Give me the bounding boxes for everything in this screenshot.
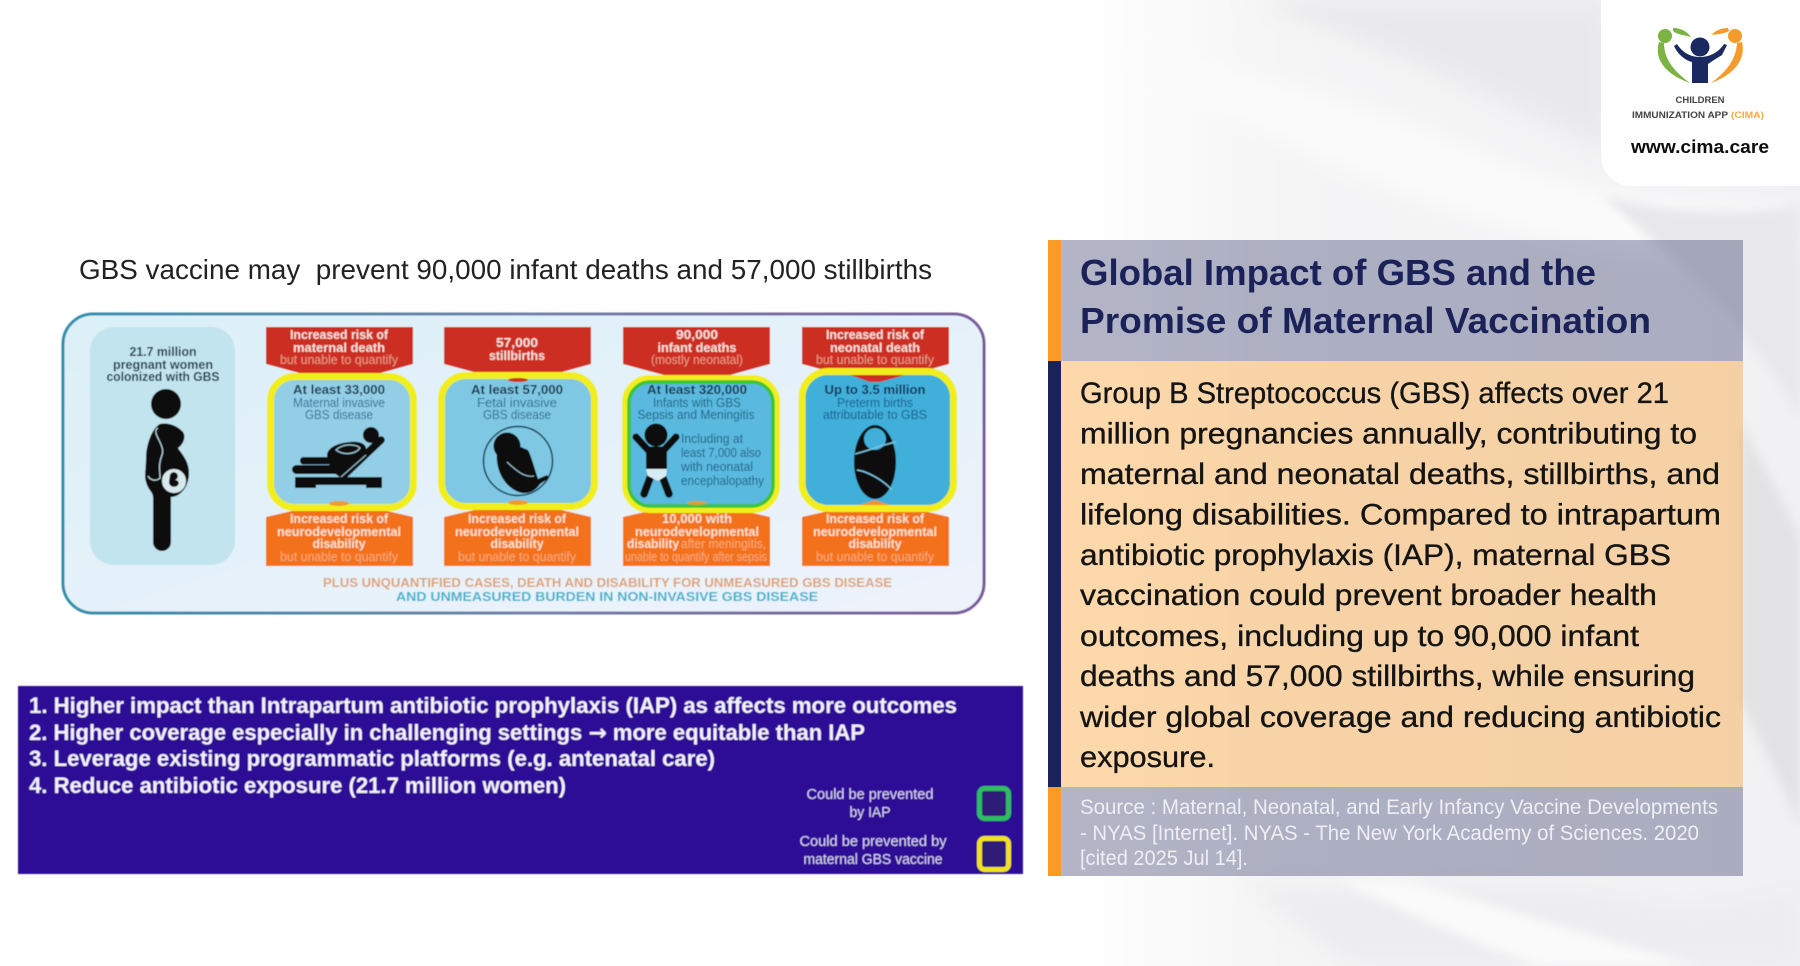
- panel: source: [1048, 787, 1743, 876]
- banner: neurodevelopmental disability: but unable to quantify: [280, 550, 399, 564]
- note: unquantified burden: [323, 575, 892, 604]
- text: app name: [1632, 95, 1764, 121]
- box: preterm births: attributable to GBS: [823, 407, 927, 422]
- box: infants with sepsis and meningitis: with neonatal: [680, 460, 753, 474]
- banner: maternal death: but unable to quantify: [280, 353, 399, 367]
- panel: title block: [1048, 240, 1743, 361]
- banner: infant deaths: infant deaths: [658, 341, 737, 355]
- box: infants with sepsis and meningitis: least 7,000 also: [681, 446, 761, 460]
- note: unquantified burden: AND UNMEASURED BURDEN IN NON-INVASIVE GBS DISEASE: [396, 589, 818, 604]
- box: infants with sepsis and meningitis: Sepsis and Meningitis: [638, 407, 755, 422]
- banner: neurodevelopmental disability: [802, 508, 949, 566]
- legend: prevented by vaccine: Could be prevented by: [800, 833, 947, 850]
- box: preterm births: Preterm births: [837, 395, 913, 410]
- card: pregnant women colonized: [90, 327, 235, 565]
- text: description: lifelong disabilities. Compared to intrapartum: [1080, 498, 1721, 532]
- banner: 10,000 with disability: unable to quantify after sepsis: [625, 550, 767, 564]
- legend: prevented by vaccine: maternal GBS vaccine: [804, 851, 942, 868]
- list: four benefits: 1. Higher impact than Intrapartum antibiotic prophylaxis (IAP) as affects more outcomes: [29, 693, 957, 718]
- text: source citation: [1080, 796, 1718, 870]
- box: infants with sepsis and meningitis: At least 320,000: [647, 382, 747, 397]
- list: four benefits: 2. Higher coverage especially in challenging settings → more equitable than IAP: [29, 720, 865, 746]
- banner: neurodevelopmental disability: disability: [490, 537, 544, 551]
- box: infants with sepsis and meningitis: encephalopathy: [681, 474, 765, 488]
- box: preterm births: [802, 372, 954, 508]
- icon: fetus in circle: [484, 426, 552, 496]
- text: description: million pregnancies annually, contributing to: [1080, 418, 1697, 450]
- card: pregnant women colonized: pregnant women: [113, 357, 213, 372]
- banner: neonatal death: neonatal death: [830, 341, 920, 355]
- box: maternal invasive disease: At least 33,000: [293, 382, 385, 397]
- banner: infant deaths: (mostly neonatal): [651, 353, 743, 367]
- heading: global impact: [1080, 252, 1651, 341]
- box: fetal invasive disease: GBS disease: [483, 407, 551, 422]
- banner: neurodevelopmental disability: Increased risk of: [826, 512, 925, 526]
- banner: maternal death: [266, 327, 413, 375]
- column: fetal: [442, 327, 594, 566]
- banner: 10,000 with disability: [623, 508, 770, 566]
- box: maternal invasive disease: [270, 376, 414, 508]
- box: infants with sepsis and meningitis: Including at: [681, 432, 744, 446]
- panel: body text: [1048, 361, 1743, 787]
- text: app name: IMMUNIZATION APP: [1632, 110, 1729, 121]
- list: four benefits: 3. Leverage existing programmatic platforms (e.g. antenatal care): [29, 746, 715, 771]
- text: website: www.cima.care: [1630, 137, 1769, 157]
- legend: prevented by vaccine: [800, 833, 1008, 870]
- heading: global impact: Global Impact of GBS and the: [1080, 252, 1596, 293]
- panel: burden infographic: [63, 314, 984, 613]
- text: source citation: - NYAS [Internet]. NYAS - The New York Academy of Sciences. 2020: [1080, 822, 1699, 845]
- list: four benefits: [29, 693, 957, 798]
- text: description: antibiotic prophylaxis (IAP), maternal GBS: [1080, 539, 1671, 572]
- banner: neurodevelopmental disability: disability: [848, 537, 902, 551]
- banner: 10,000 with disability: disability: [627, 537, 679, 551]
- text: source citation: [cited 2025 Jul 14].: [1080, 847, 1248, 870]
- icon: woman on bed: [292, 427, 382, 488]
- text: source citation: Source : Maternal, Neonatal, and Early Infancy Vaccine Developments: [1080, 796, 1718, 819]
- panel: benefits of maternal vaccine: [18, 686, 1023, 874]
- icon: swaddled baby: [854, 425, 896, 499]
- banner: 10,000 with disability: 10,000 with: [662, 512, 732, 526]
- legend: prevented by IAP: Could be prevented: [806, 786, 934, 803]
- banner: neonatal death: but unable to quantify: [816, 353, 935, 367]
- box: fetal invasive disease: At least 57,000: [471, 382, 563, 397]
- banner: neurodevelopmental disability: Increased risk of: [468, 512, 567, 526]
- banner: infant deaths: 90,000: [676, 328, 718, 342]
- box: fetal invasive disease: [442, 376, 594, 506]
- box: maternal invasive disease: GBS disease: [305, 407, 373, 422]
- banner: stillbirths: 57,000: [496, 336, 538, 350]
- banner: maternal death: Increased risk of: [290, 328, 389, 342]
- box: preterm births: Up to 3.5 million: [824, 382, 926, 397]
- banner: neurodevelopmental disability: disability: [312, 537, 366, 551]
- banner: neonatal death: Increased risk of: [826, 328, 925, 342]
- text: description: [1079, 377, 1721, 774]
- text: app name: CHILDREN: [1676, 95, 1725, 106]
- banner: neonatal death: [802, 327, 949, 375]
- banner: neurodevelopmental disability: [266, 508, 413, 566]
- column: infants: [623, 327, 776, 566]
- text: description: wider global coverage and reducing antibiotic: [1079, 701, 1721, 734]
- banner: neurodevelopmental disability: but unable to quantify: [458, 550, 577, 564]
- note: unquantified burden: PLUS UNQUANTIFIED CASES, DEATH AND DISABILITY FOR UNMEASURED GBS DISEASE: [323, 575, 892, 590]
- icon: pregnant woman: [145, 389, 189, 551]
- banner: neurodevelopmental disability: neurodevelopmental: [813, 525, 937, 539]
- box: fetal invasive disease: Fetal invasive: [477, 395, 557, 410]
- text: description: outcomes, including up to 90,000 infant: [1080, 620, 1640, 653]
- icon: baby: [636, 424, 676, 494]
- banner: maternal death: maternal death: [293, 341, 385, 355]
- text: description: Group B Streptococcus (GBS) affects over 21: [1080, 377, 1669, 410]
- banner: neurodevelopmental disability: [444, 508, 591, 566]
- banner: infant deaths: [623, 327, 770, 375]
- box: infants with sepsis and meningitis: Infants with GBS: [653, 395, 741, 410]
- card: pregnant women colonized: 21.7 million: [130, 344, 197, 359]
- logo card: [1601, 0, 1800, 186]
- legend: prevented by IAP: [806, 786, 1008, 821]
- banner: stillbirths: [444, 327, 591, 375]
- text: app name: (CIMA): [1731, 110, 1764, 121]
- column: maternal: [266, 327, 414, 566]
- banner: 10,000 with disability: after meningitis,: [681, 537, 766, 551]
- heading: left chart title: GBS vaccine may prevent 90,000 infant deaths and 57,000 stillbirths: [79, 254, 932, 285]
- icon: CIMA logo: [1658, 28, 1743, 83]
- banner: stillbirths: stillbirths: [489, 349, 545, 363]
- text: description: maternal and neonatal deaths, stillbirths, and: [1080, 458, 1720, 491]
- text: description: deaths and 57,000 stillbirths, while ensuring: [1080, 660, 1695, 693]
- legend: prevented by IAP: by IAP: [850, 804, 890, 821]
- list: four benefits: 4. Reduce antibiotic exposure (21.7 million women): [29, 773, 566, 798]
- box: infants with sepsis and meningitis: [626, 378, 776, 510]
- heading: global impact: Promise of Maternal Vaccination: [1080, 300, 1651, 341]
- text: description: exposure.: [1080, 741, 1215, 774]
- banner: neurodevelopmental disability: but unable to quantify: [816, 550, 935, 564]
- banner: 10,000 with disability: neurodevelopmental: [635, 525, 759, 539]
- banner: neurodevelopmental disability: neurodevelopmental: [455, 525, 579, 539]
- text: description: vaccination could prevent broader health: [1080, 579, 1657, 612]
- column: preterm: [802, 327, 954, 566]
- card: pregnant women colonized: colonized with GBS: [106, 369, 220, 384]
- banner: neurodevelopmental disability: neurodevelopmental: [277, 525, 401, 539]
- box: maternal invasive disease: Maternal invasive: [293, 395, 385, 410]
- banner: neurodevelopmental disability: Increased risk of: [290, 512, 389, 526]
